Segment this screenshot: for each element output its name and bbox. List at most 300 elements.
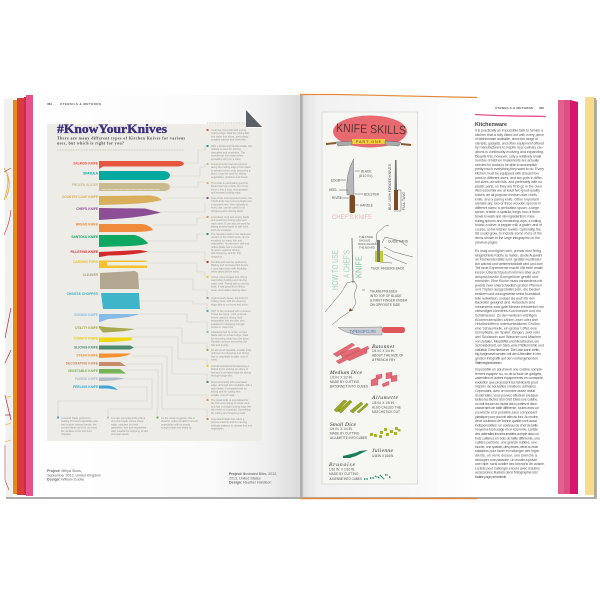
- description: paring: garnishes, fruit and vegetables.: [111, 426, 147, 430]
- knife: paring: PARING KNIFE: [75, 377, 99, 381]
- description: decorating: A serrated blade that offers a: [211, 417, 245, 421]
- text block: english: course, some kitchen towels. Optionally, the: [475, 227, 541, 231]
- knife: cleaver: [83, 271, 139, 289]
- description: decorating: intricate patterns in cheese fruit and: [211, 423, 253, 427]
- description: carving fork: A long, two-pronged fork, this is: [211, 275, 248, 279]
- description: spatula: pancakes and omelettes. The: [211, 150, 246, 154]
- hand guide illustration: SHOULD: [359, 238, 370, 242]
- description: vegetable: straight edge and sharp tip.: [161, 426, 193, 430]
- text block: french: cuillère perforée, une grande cuillère, une: [475, 441, 537, 445]
- knife: spatula: SPATULA: [83, 172, 99, 176]
- cut: small dice: MADE BY CUTTING: [330, 432, 360, 436]
- description: tomato: [206, 364, 251, 378]
- knife: frozen slicer: [72, 183, 170, 191]
- text block: english: It is practically an impossible task to furnish a: [475, 128, 544, 132]
- description: paring: A small, everyday knife with a: [111, 416, 146, 420]
- description: bread: A serrated, long and strong blade: [211, 215, 250, 219]
- description: utility: meat.: [211, 358, 218, 362]
- text block: french: dients, un verre doseur, une planche à: [475, 454, 538, 458]
- description: santoku: chopping.: [211, 254, 223, 258]
- text block: french: louche, une spatule, des pinces, deux ou trois: [475, 445, 538, 449]
- cut: brunoise: 1/16 IN. X 1/16 IN.: [329, 468, 355, 472]
- text block: french: [475, 368, 545, 479]
- description: slicing: [206, 380, 253, 397]
- description: cleaver: edge able to cut bone and joints.: [211, 302, 249, 306]
- text block: english: items shown in the large infographic on the: [475, 236, 540, 240]
- side view knife: BUY 100% FORGED KNIVES: [388, 164, 392, 210]
- text block: german: von Zutaten, Messlöffel und Messbecher, ein: [475, 339, 539, 343]
- infographic subtitle: [57, 136, 185, 146]
- how to use a chef's knife heading: KNIFE: [354, 256, 364, 278]
- description: frozen slicer: vegetables, potatoes and bread.: [211, 175, 248, 179]
- knife: slicing: SLICING KNIFE: [74, 346, 99, 350]
- credit: right: 2013, United States: [229, 476, 261, 480]
- description: peeling: the surface of the fruit then: [61, 429, 92, 433]
- description: filleting: filleting and removing fish bones,: [211, 263, 249, 267]
- description: paring: Also suitable for stripping of skin: [111, 429, 149, 433]
- text block: german: Schneidebrett, ein Sieb, eine Pfeffermühle und: [475, 344, 544, 348]
- credit: left: September 2013, United Kingdom: [47, 474, 101, 478]
- cut: brunoise: JULIENNE INTO CUBES: [329, 477, 362, 481]
- knife: chinese chopper: [67, 292, 140, 309]
- description: cleaver: A generously heavy, big knife for: [211, 296, 248, 300]
- text block: german: kurzen Übersicht jedoch können aber auch: [475, 270, 540, 274]
- how to use a chef's knife heading: [331, 250, 364, 290]
- knife: slicing: [74, 346, 134, 350]
- description: cleaver: [206, 296, 249, 306]
- description: chefs: Chef's knife has a strong blade and: [211, 199, 252, 203]
- text block: english: utensils are: two or three wooden spoons in: [475, 202, 541, 206]
- text block: german: natürlich Geschirrtücher. Die Liste kann belie-: [475, 348, 541, 352]
- description: salmon: [206, 128, 250, 142]
- credit: right: [229, 472, 277, 484]
- description: salmon: into wafer thin slices, particularly: [211, 134, 249, 138]
- text block: english: suring spoons and measuring cups; a cutting: [475, 219, 541, 223]
- knife: chefs: CHEFS KNIFE: [76, 207, 99, 211]
- chef's knife diagram: [329, 159, 380, 221]
- text block: english: by manufacturers to inspire new culinary cre-: [475, 146, 544, 150]
- knife: filleting: FILLETING KNIFE: [71, 250, 99, 254]
- cut: small dice: [330, 422, 400, 440]
- description: tomato: A small serrated knife featuring a: [211, 364, 249, 368]
- chef's knife diagram: (8-10 IN.): [359, 174, 372, 178]
- description: chinese chopper: suitable for chopping through: [211, 322, 245, 326]
- hand guide illustration: TUCK FINGERS BACK: [371, 266, 405, 270]
- text block: german: Holzlöchlöffel in unterschiedlichen Größen,: [475, 322, 541, 326]
- knife: tomato: [74, 336, 133, 342]
- description: santoku: [206, 232, 251, 258]
- text block: english: utensils, gadgets, and other equipment offered: [475, 141, 544, 145]
- text block: german: lich wächst und weiterentwickelt wird und zum: [475, 262, 543, 266]
- text block: french: d'ustensiles, vous pouvez effectuer presque: [475, 393, 538, 397]
- text block: german: drei Schüsseln zum Waschen und Mischen: [475, 335, 541, 339]
- text block: german: jeweils zwei unterschiedlich großen Pfannen: [474, 283, 542, 287]
- cut: batonnet: Batonnet: [372, 344, 394, 350]
- side view knife: [388, 160, 406, 211]
- hand guide illustration: GUIDE HAND: [388, 240, 409, 244]
- chef's knife diagram: EDGE: [331, 178, 340, 182]
- right page colour bands: [558, 97, 596, 497]
- text block: english: kitchen that is fully kitted out with every piece: [475, 133, 544, 137]
- description: chefs: One of the most popular knives, the: [211, 196, 253, 200]
- description: santoku: excellent for meat, fish and: [211, 238, 243, 242]
- text block: english: [475, 128, 544, 244]
- text block: french: des ustensiles incontournables compte deux ou: [475, 432, 539, 436]
- cut: brunoise: MADE BY CUTTING: [329, 472, 359, 476]
- description: spatula: [206, 144, 253, 161]
- side view knife: FULL TANG: [402, 191, 406, 210]
- cut: batonnet: A FRENCH FRY: [372, 358, 396, 362]
- description: peeling: curved blade can fit in my hand: [61, 426, 97, 430]
- description: bread: each other. It can also be used for: [211, 221, 250, 225]
- text block: french: couvercle et si possible sans composant: [475, 410, 537, 414]
- cut: brunoise: [329, 462, 391, 481]
- title badge: [326, 116, 411, 148]
- description: peeling: [57, 416, 98, 436]
- description: boning: fish and poultry.: [211, 343, 229, 347]
- description: chefs: [206, 196, 253, 213]
- description: country loaf: This knife is particularly good for: [211, 181, 248, 185]
- description: spatula: spreading icing on a cake.: [211, 157, 241, 161]
- cut: batonnet: ABOUT THE SIZE OF: [372, 354, 403, 358]
- panel: knife skills poster: [322, 112, 418, 484]
- text block: french: Cependant, avec un nombre assez réduit: [475, 389, 535, 393]
- description: boning: Characterised by a thin, curved: [211, 330, 247, 334]
- description: utility: fruit or vegetable smaller cuts of: [211, 354, 248, 358]
- text block: english: plastic parts, so they are fit to go in the oven.: [475, 184, 543, 188]
- credit: right: Design: Heather Hardison: [229, 480, 271, 484]
- cut: brunoise: Brunoise: [329, 462, 356, 468]
- cut: allumette: MATCHSTICK CUT: [372, 410, 400, 414]
- description: carving fork: used when holding and carving: [211, 278, 247, 282]
- folded corner: [246, 108, 264, 128]
- description: slicing: edge, although also available with a: [211, 383, 253, 387]
- text block: english: Despite this, however, only a relatively small: [475, 154, 541, 158]
- description: santoku: The Santoku knife is the Japanese: [211, 232, 251, 236]
- description: spatula: With a broad and flexible blade, this: [211, 144, 253, 148]
- text block: english: pans in different sizes, and two pots in differ-: [475, 176, 544, 180]
- description: paring: edge, matches for fresh: [111, 422, 139, 426]
- types of cuts knife: [338, 327, 405, 335]
- text block: german: Es mag unmöglich sein, jemals eine fertig: [475, 249, 541, 253]
- how to use a chef's knife heading: A CHEF'S: [342, 250, 352, 278]
- knife: salmon: SALMON KNIFE: [73, 162, 99, 166]
- right page: [300, 94, 558, 498]
- knife: peeling: [73, 385, 118, 390]
- description: frozen slicer: [206, 162, 251, 179]
- description: chefs: a rounded heel. Very versatile in: [211, 202, 249, 206]
- cut: medium dice: BATONNET INTO CUBES: [330, 384, 368, 388]
- chef's knife diagram: BOLSTER: [364, 192, 380, 196]
- description: carving fork: roast meat. Paired with a carving: [211, 281, 249, 285]
- description: santoku: hollow blade has a rounded: [211, 245, 243, 249]
- infographic subtitle: uses, but which is right for you?: [57, 142, 124, 146]
- text block: french: moyenne tout usage et un économe. La liste: [475, 428, 538, 432]
- description: peeling: releases.: [61, 432, 72, 436]
- description: tomato: through tough skin.: [211, 374, 233, 378]
- thumb hand illustration: [325, 238, 408, 325]
- description: country loaf: [206, 181, 249, 195]
- description: spatula: rounded tip also helps when: [211, 154, 244, 158]
- text block: french: indispensables: un couteau de chef de taille: [475, 423, 538, 427]
- text block: english: board; a sieve; a pepper mill; a grater; and of: [475, 223, 543, 227]
- cut: julienne: 1/16 IN. X 1/16 IN.: [372, 454, 394, 458]
- title badge: KNIFE SKILLS: [336, 121, 406, 137]
- description: peeling: peeling fruit and vegetables and: [61, 419, 98, 423]
- description: peeling: A curved blade perfect for: [61, 416, 91, 420]
- text block: german: besitzen und vorzugsweise keine Kunststoff-: [475, 292, 542, 296]
- cut: allumette: Allumette: [371, 395, 399, 401]
- description: paring: and peel seeds.: [111, 432, 130, 436]
- description: chinese chopper: NOT to be confused with a cleaver.: [211, 309, 252, 313]
- description: country loaf: since it has a long, incorporated: [211, 187, 248, 191]
- description: chinese chopper: preparation that are also very: [211, 319, 245, 323]
- text block: french: toutes les tâches d'un chef. Dans une cuisine,: [475, 398, 538, 402]
- text block: german: Küchenutensilien zählen zwei oder drei: [475, 318, 538, 322]
- knife: steak: [76, 354, 131, 358]
- chef's knife diagram: BLADE: [361, 170, 371, 174]
- text block: german: an Küchenutensilien und -geräten kontinuier-: [475, 258, 543, 262]
- description: santoku: version of the Chef's knife, and is: [211, 235, 250, 239]
- knife: vegetable: [68, 369, 126, 374]
- description: peeling: with a short narrow handle, the: [61, 422, 97, 426]
- text block: german: Backofen geeignet sind. Außerdem sind: [475, 301, 535, 305]
- thumb hand illustration: & FIRST FINGER UNDER: [370, 298, 408, 302]
- description: utility: An all-round versatile, smaller knife: [211, 348, 252, 352]
- text block: english: bowls to wash and mix ingredients in; mea-: [475, 214, 536, 218]
- cut: medium dice: MADE BY CUTTING: [330, 380, 360, 384]
- cut: julienne: [343, 448, 394, 458]
- description: tomato: fruit and a serrated edge for slicing: [211, 370, 251, 374]
- text block: english: needed for cooks to be able to accomplish: [475, 163, 537, 167]
- knife: santoku: [71, 235, 148, 247]
- knife: boning: BONING KNIFE: [74, 313, 99, 317]
- left page: [33, 95, 300, 497]
- text block: german: Teil neue Experimente macht. Mit einer relativ: [475, 266, 543, 270]
- heading: kitchenware: Kitchenware: [475, 122, 507, 128]
- description: filleting: when taken off the meat.: [211, 270, 240, 274]
- knife: santoku: SANTOKU KNIFE: [71, 235, 99, 239]
- text block: german: und Töpfen ausgestattet sein, die Deckel: [475, 288, 540, 292]
- description: decorating: pronounced cut and for carving: [211, 420, 247, 424]
- text block: french: tement équipée où, vu de la foule de gadgets,: [475, 372, 542, 376]
- cut: small dice: Small Dice: [330, 422, 357, 428]
- left page edge with coloured strips: [4, 95, 33, 497]
- knife: decorating: DECORATING KNIFE: [66, 362, 99, 366]
- infographic panel: [47, 108, 264, 441]
- text block: english: Also essential are at least two good-quality: [475, 189, 540, 193]
- text block: english: kitchen must be equipped with at least two: [475, 172, 539, 176]
- text block: french: inspirer de nouvelles créations culinaires.: [475, 385, 537, 389]
- knife: boning: [74, 313, 139, 322]
- description: santoku: and chopping, and for fine: [211, 251, 242, 255]
- description: bread: [206, 215, 250, 232]
- knife: decorating: [66, 362, 126, 366]
- cut: small dice: ALLUMETTE INTO CUBES: [330, 436, 367, 440]
- hand guide illustration: ROCK AGAINST: [358, 242, 379, 246]
- text block: german: Seiten ergänzt werden.: [475, 361, 502, 365]
- title badge: PART ONE: [356, 140, 382, 144]
- credit: left: Design: William Cooke: [47, 478, 84, 482]
- knife: frozen slicer: FROZEN SLICER: [72, 183, 99, 187]
- description: boning: Flexible versions are perfect for: [211, 340, 247, 344]
- text block: english: previous pages.: [475, 240, 498, 244]
- description: decorating: vegetables.: [211, 427, 225, 431]
- text block: english: spoon; a ladle; a spatula; tongs; two or three: [475, 210, 540, 214]
- knife: utility: UTILITY KNIFE: [75, 326, 99, 330]
- knife: carving fork: [73, 260, 147, 268]
- thumb hand illustration: ON OPPOSITE SIDE: [370, 303, 400, 307]
- knife: steak: STEAK KNIFE: [76, 354, 99, 358]
- knife: cleaver: CLEAVER: [83, 273, 99, 277]
- text block: french: Impossible en soi d'avoir une cuisine complè-: [475, 368, 544, 372]
- cut: allumette: ALSO CALLED THE: [372, 406, 401, 410]
- text block: german: teile aufweisen, sodass sie auch für den: [475, 296, 535, 300]
- book shadow: [6, 100, 597, 499]
- cut: allumette: 1/8 IN. X 1/8 IN.: [372, 401, 395, 405]
- cut: batonnet: 1/4 IN. X 1/4 IN.: [372, 349, 395, 353]
- text block: french: une râpe, sans oublier des torchons de cuisine.: [475, 462, 545, 466]
- description: slicing: smaller cuts of meat.: [211, 393, 235, 397]
- cut: allumette: [334, 395, 401, 414]
- left page running header: 364: [47, 102, 52, 106]
- description: santoku: vegetables. Its narrower, stiff and: [211, 242, 250, 246]
- text block: french: plastique pour pouvoir aller au four. Au moins: [475, 415, 538, 419]
- text block: french: saladiers pour laver et mélanger des ingré-: [475, 449, 541, 453]
- how to use a chef's knife heading: HOW TO USE: [331, 250, 340, 290]
- text block: german: big fortgesetzt werden mit den Utensilien in der: [475, 352, 542, 356]
- text block: english: knives: an all-purpose medium-size chef's: [475, 193, 537, 197]
- connector lines: [58, 146, 207, 419]
- description: chefs: chopping and mincing tasks.: [211, 209, 244, 213]
- description: frozen slicer: A special knife that can process: [211, 162, 248, 166]
- types of cuts knife: TYPES OF CUTS: [349, 329, 376, 334]
- description: slicing: Most commonly with a serrated: [211, 380, 247, 384]
- text block: french: évolution que proposent les fabricants pour: [475, 380, 539, 384]
- text block: french: casseroles de taille différente, toutes avec un: [475, 406, 539, 410]
- text block: english: knife, and a paring knife. Other important: [475, 197, 539, 201]
- knife: peeling: PEELING KNIFE: [73, 385, 99, 389]
- credit: left: Project: Mihya Sloss,: [47, 469, 82, 473]
- text block: german: eingerichtete Küche zu haben, da die Auswahl: [475, 253, 542, 257]
- description: salmon: cutting edge. Ideal for cutting fish: [211, 131, 250, 135]
- description: santoku: tip and is used for slicing: [211, 248, 240, 252]
- text block: french: trois cuillères en bois de taille différente, une: [475, 436, 540, 440]
- description: boning: for removing meat from the bone.: [211, 336, 250, 340]
- text block: french: on doit trouver au moins deux poêles et deux: [475, 402, 537, 406]
- description: paring: very fine blade. Has a sharp: [111, 419, 144, 423]
- text block: french: deux couteaux de bonne qualité sont aussi: [475, 419, 537, 423]
- description: bread: slicing several types of soft food,: [211, 225, 249, 229]
- description: filleting: [206, 260, 249, 274]
- description: vegetable: ideal for cutting smaller fruit and: [161, 419, 198, 423]
- text block: french: La liste peut s'allonger encore avec d'autres: [475, 466, 540, 470]
- credit: right: Project: Illustrated Bites, 2012,: [229, 472, 277, 476]
- chef's knife diagram: CHEF'S KNIFE: [332, 214, 373, 221]
- description: tomato: forked tip for picking up slices of: [211, 367, 248, 371]
- text block: german: großen Infografik auf den vorhergehenden: [475, 356, 538, 360]
- thumb hand illustration: INTO TOP OF BLADE: [370, 294, 401, 298]
- knife: carving fork: CARVING FORK: [73, 260, 99, 264]
- hand guide illustration: THE KNIFE: [359, 235, 373, 239]
- chef's knife diagram: RIVET: [332, 196, 341, 200]
- text block: german: vielseitiges kleineres Kochmesser und ein: [475, 309, 541, 313]
- description: spatula: spatula is used for turning: [211, 147, 241, 151]
- description: filleting: it runs right down with flexibility: [211, 266, 247, 270]
- text block: german: eine Schaumkelle, ein großer Löffel, eine: [475, 326, 537, 330]
- description: carving fork: meat, and makes carving safer.: [211, 288, 247, 292]
- knife: filleting: [71, 250, 148, 257]
- text block: english: ent sizes, all with lids, and preferably with no: [475, 180, 542, 184]
- cut: medium dice: [329, 370, 397, 388]
- description: chinese chopper: knives used for slicing food: [211, 315, 243, 319]
- text block: french: découper, une passoire, un moulin à poivre,: [475, 458, 538, 462]
- chef's knife diagram: HANDLE: [360, 204, 373, 208]
- text block: english: different sizes; a perforated spoon; a large: [475, 206, 539, 210]
- description: chefs: every use, can be used for all: [211, 206, 245, 210]
- description: chinese chopper: [206, 309, 252, 329]
- cut: julienne: Julienne: [372, 448, 394, 454]
- description: frozen slicer: along the cutting edge of the blade: [211, 165, 251, 169]
- text block: english: number of kitchen implements are actually: [475, 159, 539, 163]
- thumb hand illustration: THUMB PRESSES: [370, 290, 397, 294]
- text block: german: Schälmesser. Zu den weiteren wichtigen: [475, 314, 537, 318]
- knife: salmon: [73, 161, 184, 169]
- description: steak: [206, 398, 252, 415]
- hand guide illustration: [358, 225, 413, 270]
- knife: chinese chopper: CHINESE CHOPPER: [67, 292, 99, 296]
- text block: english: list could grow, to include some more of the: [475, 232, 542, 236]
- description: carving fork: knife, it has good lift for lifting: [211, 285, 245, 289]
- text block: english: ations is continually evolving and expanding.: [475, 150, 544, 154]
- divider pink: [475, 114, 546, 116]
- description: boning: [206, 330, 250, 347]
- infographic subtitle: There are many different types of Kitchen Knives for various: [57, 136, 185, 140]
- description: salmon: A narrow, thin knife with a long: [211, 128, 247, 132]
- cut: small dice: 1/4 IN. X 1/4 IN.: [330, 427, 353, 431]
- description: frozen slicer: to prevent it from ever becoming a: [211, 168, 251, 172]
- description: utility: [206, 348, 252, 362]
- knife: bread: BREAD KNIFE: [76, 222, 99, 226]
- description: vegetable: As the name suggests, this is: [161, 416, 195, 420]
- text block: german: anspruchsvolle Kochgelüste gestillt und: [475, 275, 538, 279]
- knife: spatula: [83, 171, 170, 180]
- description: vegetable: [156, 416, 198, 430]
- text block: german: Schöpfkelle, ein Spatel, Zangen, zwei oder: [475, 331, 541, 335]
- description: carving fork: [206, 275, 249, 292]
- description: vegetable: vegetables with its strong: [161, 422, 191, 426]
- text block: french: accessoires illustrés dans l'infographie très: [475, 471, 538, 475]
- text block: english: pretty much everything they want to do. Every: [475, 167, 544, 171]
- text block: german: mindestens zwei gute Messer erforderlich: ein: [475, 305, 544, 309]
- infographic title: #KnowYourKnives: [57, 121, 167, 136]
- description: country loaf: and serrated cutting edge.: [211, 191, 241, 195]
- description: slicing: plain blade. A versatile knife for: [211, 386, 247, 390]
- cut: medium dice: Medium Dice: [329, 370, 363, 376]
- cut: medium dice: 1/2 IN. X 1/2 IN.: [330, 376, 353, 380]
- chef's knife diagram: HEEL: [329, 188, 338, 192]
- description: steak: the metal on a spatula. Something: [211, 408, 251, 412]
- description: bread: such as tomatoes.: [211, 228, 232, 232]
- knife: vegetable: VEGETABLE KNIFE: [68, 369, 99, 373]
- text block: english: of kitchenware available, since the range of: [475, 137, 539, 141]
- hand guide illustration: THE BOARD: [359, 246, 375, 250]
- description: steak: The steak knife is specialised for: [211, 398, 249, 402]
- description: steak: and has a straight cutting edge like: [211, 404, 252, 408]
- description: filleting: Flexible and narrow, perfect for: [211, 260, 247, 264]
- description: bread: and matching cutting edge and: [211, 218, 247, 222]
- description: chinese chopper: These are large, multi-purpose: [211, 312, 247, 316]
